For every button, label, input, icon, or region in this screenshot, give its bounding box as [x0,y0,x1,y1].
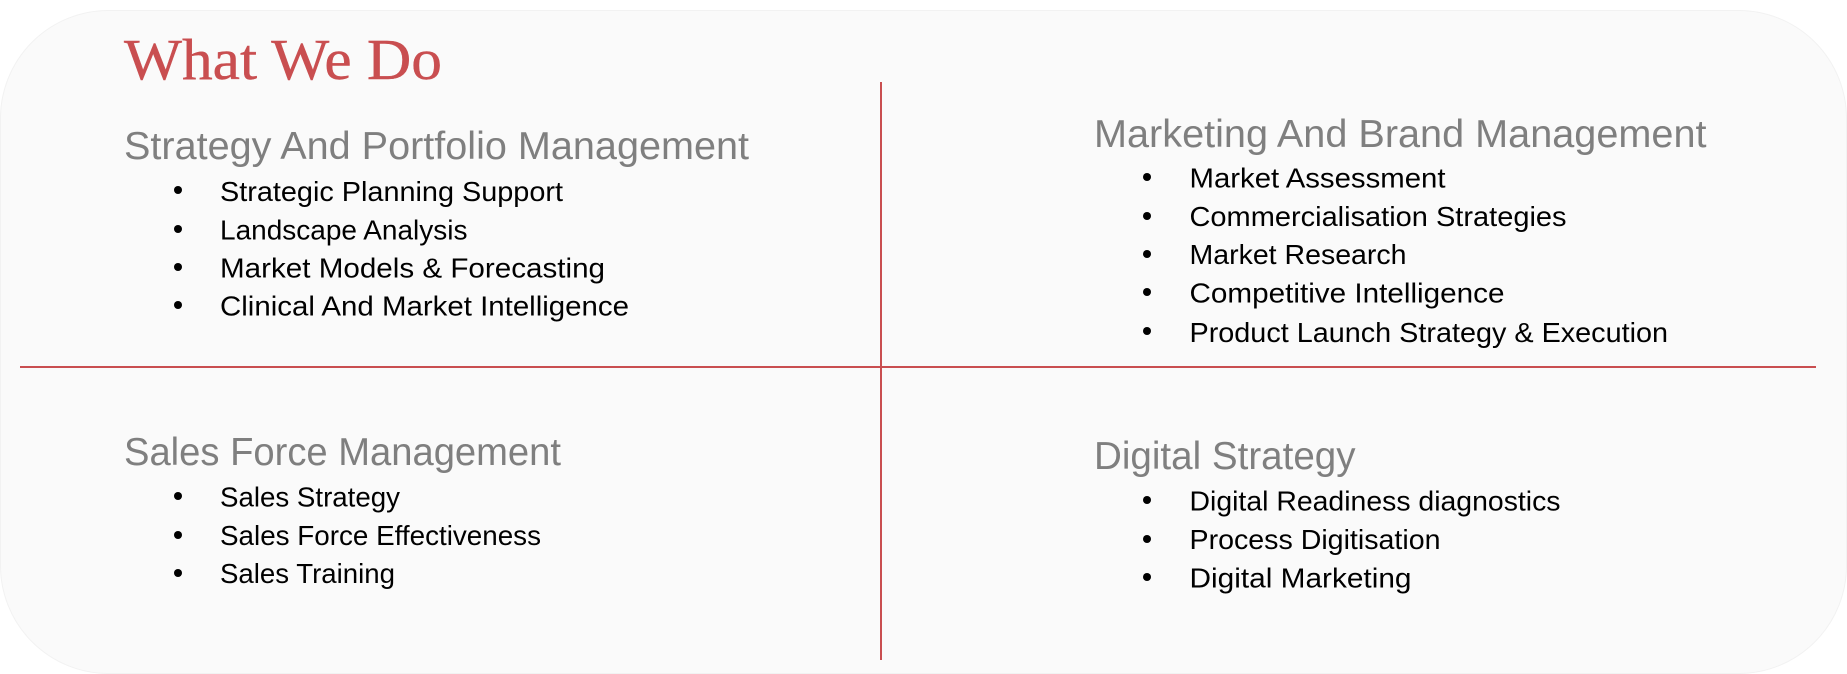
panel: strategy and portfolio management [124,125,749,322]
horizontal divider [20,366,1816,368]
list: digital items: Process Digitisation [1190,524,1440,555]
panel: marketing and brand management [1094,113,1707,348]
heading: sales force management: Sales Force Management [124,431,561,474]
panel: sales force management [124,431,561,589]
vertical divider [880,82,882,660]
list: marketing items: Commercialisation Strategies [1190,201,1566,232]
list: digital items [1143,486,1560,594]
list: marketing items: Competitive Intelligence [1190,278,1504,309]
list: strategy items: Market Models & Forecasting [220,253,605,284]
heading: strategy and portfolio management: Strategy And Portfolio Management [124,125,749,168]
heading: marketing and brand management: Marketing And Brand Management [1094,113,1707,156]
list: sales items [174,482,541,589]
list: strategy items: Landscape Analysis [220,214,468,246]
list: marketing items: Market Assessment [1190,163,1446,194]
list: marketing items: Product Launch Strategy & Execution [1190,317,1668,348]
list: marketing items [1143,163,1668,348]
list: marketing items: Market Research [1190,239,1406,270]
list: sales items: Sales Training [220,558,395,589]
heading: digital strategy: Digital Strategy [1094,435,1356,478]
list: digital items: Digital Readiness diagnostics [1190,486,1560,517]
list: strategy items: Strategic Planning Support [220,176,563,207]
list: digital items: Digital Marketing [1190,563,1412,594]
list: sales items: Sales Force Effectiveness [220,520,541,551]
title: What We Do [124,27,442,92]
list: strategy items [174,176,629,322]
list: strategy items: Clinical And Market Intelligence [220,291,629,322]
panel: digital strategy [1094,435,1560,594]
list: sales items: Sales Strategy [220,482,400,513]
